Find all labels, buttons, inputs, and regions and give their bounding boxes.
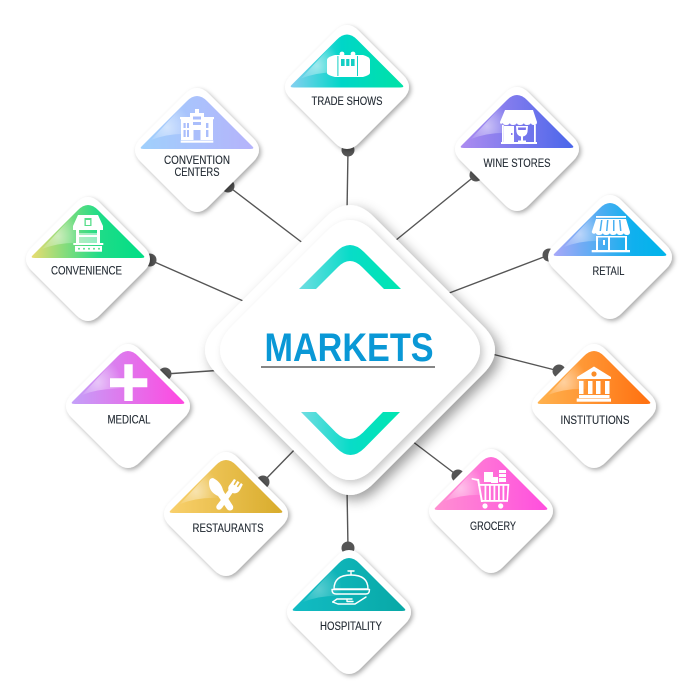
icon: exhibition booth	[327, 52, 370, 77]
connector: wine stores	[390, 168, 482, 245]
connector: retail	[444, 248, 556, 295]
connector: restaurants	[256, 444, 300, 488]
card: restaurants	[164, 452, 288, 576]
card: convention centers	[135, 88, 259, 212]
label: hospitality: HOSPITALITY	[320, 621, 382, 633]
label: grocery: GROCERY	[470, 521, 516, 533]
icon: medical cross	[110, 364, 147, 401]
connector: grocery	[408, 438, 464, 482]
bottom chevron	[301, 412, 400, 455]
label: convention centers: CONVENTION	[164, 155, 230, 167]
heading: markets: MARKETS	[264, 326, 434, 370]
card: convenience	[26, 197, 150, 321]
connector: institutions	[488, 353, 566, 378]
card: retail	[548, 195, 672, 319]
label: convention centers: CENTERS	[174, 167, 220, 179]
icon: convenience kiosk	[73, 215, 103, 252]
label: institutions: INSTITUTIONS	[560, 415, 630, 427]
central panel: markets	[205, 205, 495, 495]
card: wine stores	[455, 87, 579, 211]
label: convenience: CONVENIENCE	[51, 266, 122, 278]
icon: institution columns	[577, 366, 611, 402]
label: trade shows: TRADE SHOWS	[312, 96, 383, 108]
connector: convention centers	[222, 180, 308, 247]
card: institutions	[532, 344, 656, 468]
connector: convenience	[144, 254, 250, 304]
icon: knife and fork	[209, 478, 243, 510]
label: wine stores: WINE STORES	[484, 158, 551, 170]
connector: trade shows	[342, 144, 354, 212]
icon: building	[180, 109, 214, 143]
icon: retail shop	[592, 216, 630, 252]
card: trade shows	[285, 25, 409, 149]
top chevron	[299, 245, 401, 289]
icon: cloche on hand	[332, 571, 370, 604]
card: hospitality	[287, 550, 411, 674]
label: retail: RETAIL	[592, 266, 625, 278]
card: medical	[66, 344, 190, 468]
label: convention centers	[164, 155, 230, 179]
label: restaurants: RESTAURANTS	[192, 523, 264, 535]
label: medical: MEDICAL	[108, 414, 151, 426]
icon: shopping cart	[472, 470, 509, 509]
heading underline	[261, 366, 435, 368]
connector: hospitality	[342, 488, 354, 554]
card: grocery	[429, 449, 553, 573]
icon: wine store	[500, 110, 537, 144]
connector: medical	[158, 368, 224, 380]
